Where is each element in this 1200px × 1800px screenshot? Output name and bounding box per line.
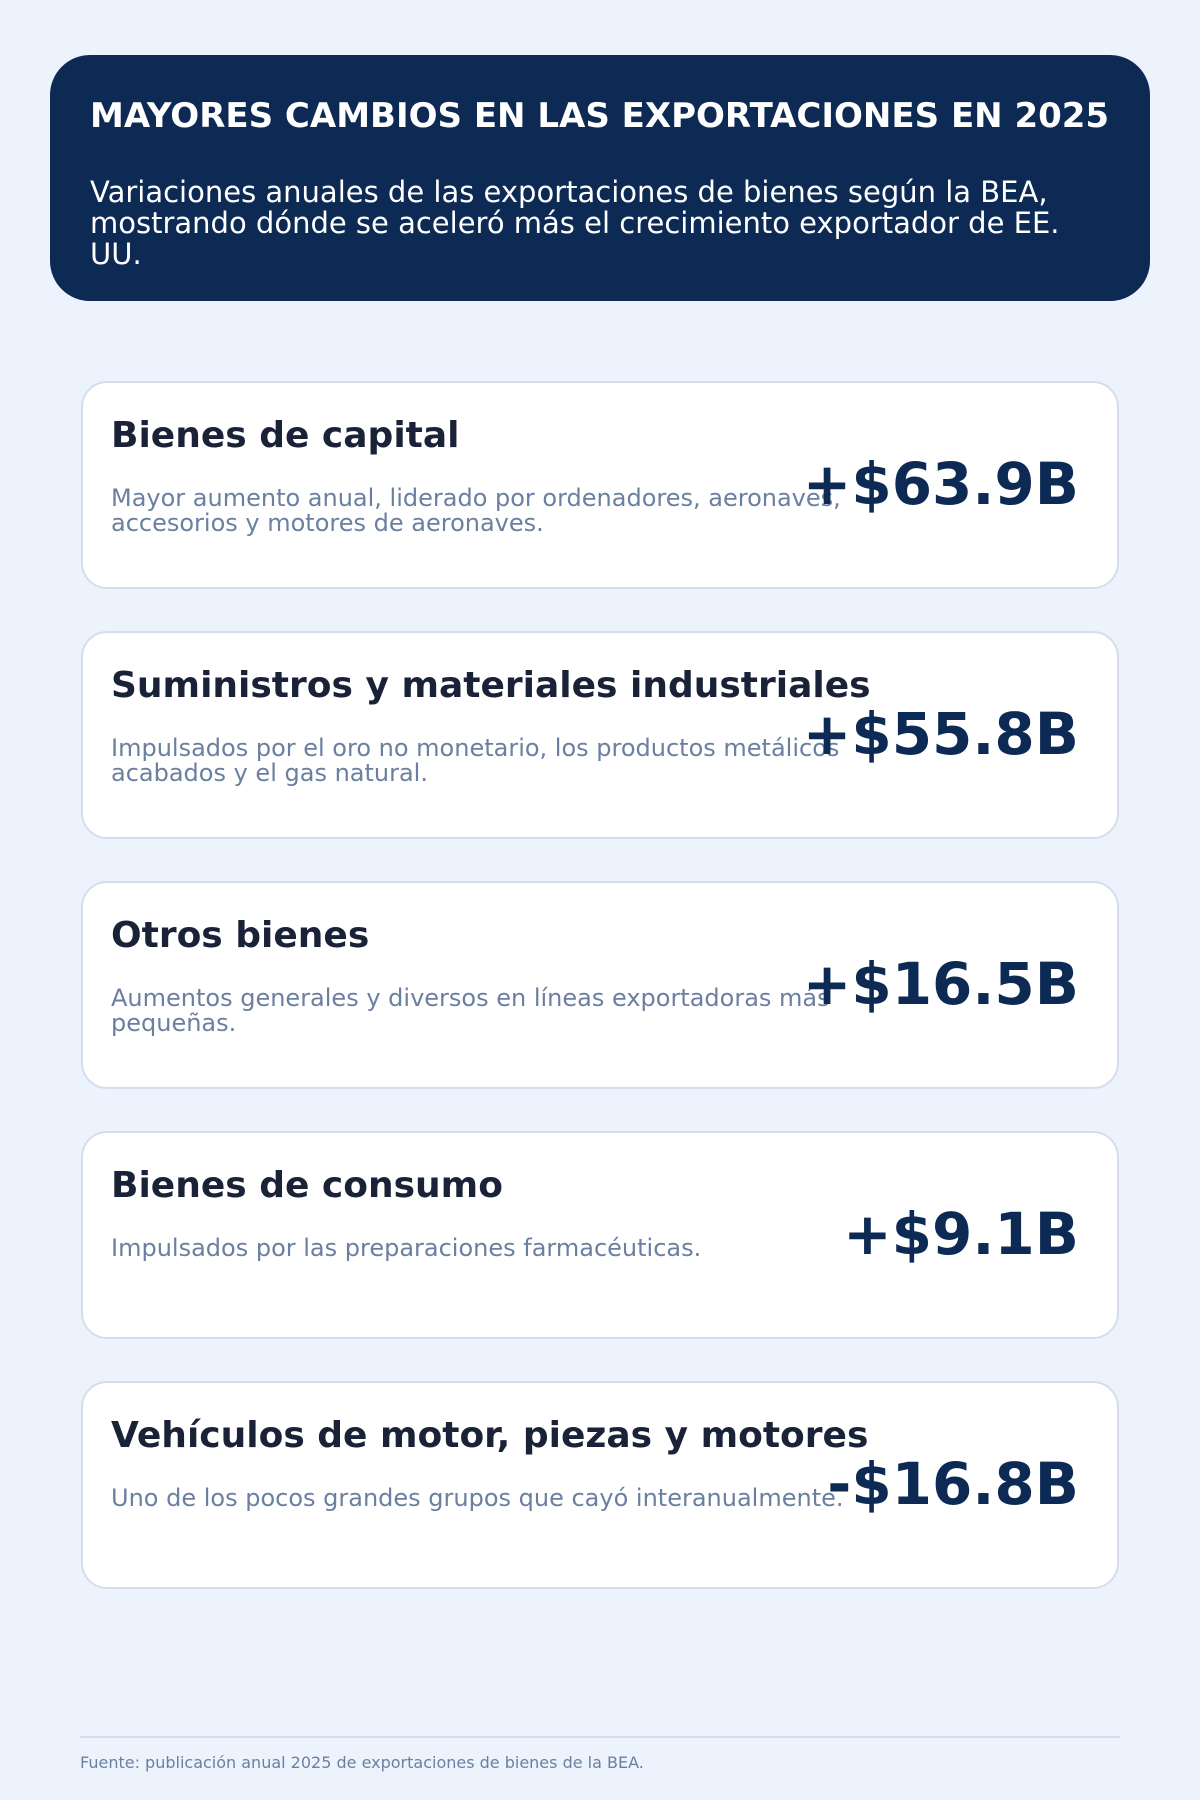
card: otros bienes: [81, 881, 1119, 1089]
card title: Bienes de capital: [111, 415, 460, 456]
card description: Impulsados por las preparaciones farmacéuticas.: [111, 1234, 701, 1262]
card: bienes de capital: [81, 381, 1119, 589]
card description: Mayor aumento anual, liderado por ordenadores, aeronaves, accesorios y motores de aeronaves.: [111, 484, 841, 537]
header panel: [50, 55, 1150, 301]
source footnote: Fuente: publicación anual 2025 de exportaciones de bienes de la BEA.: [80, 1753, 644, 1772]
card description: Uno de los pocos grandes grupos que cayó interanualmente.: [111, 1484, 844, 1512]
title: MAYORES CAMBIOS EN LAS EXPORTACIONES EN 2025: [90, 96, 1109, 136]
card value: +$55.8B: [803, 700, 1079, 768]
card description: Impulsados por el oro no monetario, los productos metálicos acabados y el gas natural.: [111, 734, 839, 787]
subtitle: Variaciones anuales de las exportaciones de bienes según la BEA, mostrando dónde se aceleró más el crecimiento exportador de EE. UU.: [90, 175, 1060, 271]
card: suministros industriales: [81, 631, 1119, 839]
card value: +$63.9B: [803, 450, 1079, 518]
card: vehículos de motor: [81, 1381, 1119, 1589]
card title: Bienes de consumo: [111, 1165, 503, 1206]
card value: +$16.5B: [803, 950, 1079, 1018]
card: bienes de consumo: [81, 1131, 1119, 1339]
card title: Suministros y materiales industriales: [111, 665, 871, 706]
card title: Otros bienes: [111, 915, 369, 956]
card value: +$9.1B: [843, 1200, 1079, 1268]
card value: -$16.8B: [827, 1450, 1079, 1518]
card description: Aumentos generales y diversos en líneas exportadoras más pequeñas.: [111, 984, 830, 1037]
card title: Vehículos de motor, piezas y motores: [111, 1415, 868, 1456]
